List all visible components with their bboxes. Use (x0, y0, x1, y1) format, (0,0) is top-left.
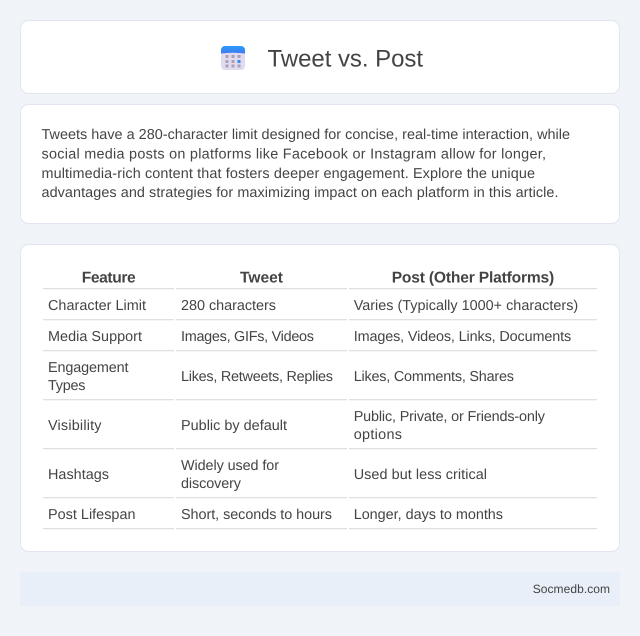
title: Tweet vs. Post (268, 46, 423, 73)
row: character limit: 280 characters (181, 298, 276, 314)
row: post lifespan: Longer, days to months (354, 507, 503, 523)
row: character limit: Varies (Typically 1000+ characters) (354, 298, 578, 314)
row: engagement types: Engagement (48, 360, 128, 376)
footer bar (20, 572, 620, 606)
row: visibility: Public, Private, or Friends-only (354, 409, 546, 425)
table header: Post (Other Platforms) (392, 270, 554, 286)
panel: title card (20, 20, 620, 94)
intro text: multimedia-rich content that fosters deeper engagement. Explore the unique (42, 166, 535, 182)
row: post lifespan: Short, seconds to hours (181, 507, 332, 523)
row: hashtags: Hashtags (48, 467, 109, 483)
intro text: advantages and strategies for maximizing impact on each platform in this article. (42, 185, 558, 201)
row: media support (48, 329, 571, 345)
row: media support: Images, Videos, Links, Documents (354, 329, 571, 345)
table header: Tweet (240, 270, 283, 286)
row: engagement types: Likes, Retweets, Replies (181, 369, 333, 385)
row: character limit (48, 298, 578, 314)
row: visibility: Visibility (48, 418, 102, 434)
row: engagement types (48, 360, 514, 394)
row: visibility (48, 409, 546, 443)
intro text: social media posts on platforms like Facebook or Instagram allow for longer, (42, 146, 546, 162)
row: post lifespan: Post Lifespan (48, 507, 136, 523)
intro text: Tweets have a 280-character limit designed for concise, real-time interaction, while (42, 127, 570, 143)
row: hashtags (48, 458, 487, 492)
row: media support: Media Support (48, 329, 142, 345)
panel: comparison table (20, 244, 620, 552)
table header: Feature (82, 270, 136, 286)
row: hashtags: Used but less critical (354, 467, 487, 483)
row: post lifespan (48, 507, 503, 523)
row: visibility: Public by default (181, 418, 287, 434)
row: visibility: options (354, 427, 402, 443)
footer source: Socmedb.com (533, 582, 610, 596)
row: hashtags: Widely used for (181, 458, 279, 474)
row: media support: Images, GIFs, Videos (181, 329, 314, 345)
icon: calendar (221, 46, 245, 70)
row: hashtags: discovery (181, 476, 242, 492)
row: engagement types: Types (48, 378, 86, 394)
row: character limit: Character Limit (48, 298, 146, 314)
row: engagement types: Likes, Comments, Shares (354, 369, 514, 385)
table header (82, 270, 554, 286)
intro text (42, 127, 570, 201)
panel: intro (20, 104, 620, 224)
